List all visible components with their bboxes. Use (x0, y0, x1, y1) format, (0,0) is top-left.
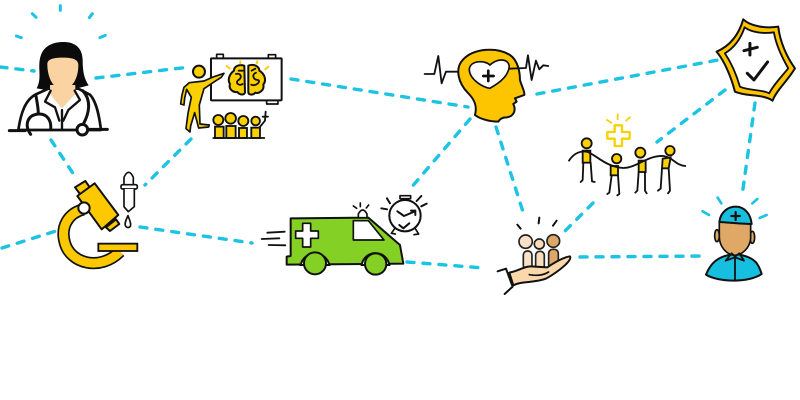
brain (229, 65, 265, 95)
wheels (301, 252, 389, 275)
stethoscope (9, 91, 107, 135)
doctor hair (37, 42, 89, 91)
siren (353, 203, 369, 218)
microscope base (98, 244, 137, 251)
heartbeat lines (425, 55, 548, 83)
figures (569, 138, 685, 195)
nurse rays (703, 198, 767, 218)
whiteboard (211, 54, 282, 104)
coat collar and seam (45, 91, 80, 130)
heart (469, 60, 509, 88)
doctor attention rays (16, 6, 105, 38)
nurse cap (719, 207, 752, 224)
golden cross (607, 125, 630, 146)
dropper (121, 172, 137, 228)
icon: head with heart and heartbeat (425, 50, 548, 122)
shield inner (725, 27, 788, 93)
icon: speeding ambulance (262, 196, 427, 275)
nurse ears (715, 230, 755, 243)
speed lines (262, 232, 285, 245)
icon: doctor with stethoscope (9, 6, 107, 135)
icon: microscope and dropper (64, 172, 137, 263)
open hand (509, 256, 570, 285)
shirt cuff (498, 269, 513, 294)
brain rays (227, 61, 268, 69)
icon: shield with check (717, 19, 795, 101)
ambulance cross (296, 223, 318, 247)
shield cross and check (744, 43, 768, 80)
audience (213, 112, 268, 138)
network of dashed connectors (0, 60, 755, 268)
nurse face (719, 222, 751, 255)
head silhouette (458, 50, 524, 122)
nurse uniform (706, 253, 762, 281)
ambulance body (287, 218, 403, 265)
icon: hand holding people (498, 218, 570, 294)
presenter figure (181, 66, 224, 132)
alarm clock (381, 196, 427, 235)
microscope arm (64, 209, 120, 263)
ambulance window (353, 221, 384, 240)
people rays (517, 218, 557, 229)
heart cross (483, 71, 494, 81)
cross rays (607, 114, 630, 123)
neck (50, 85, 75, 108)
face (47, 58, 78, 90)
microscope tube (75, 181, 119, 231)
shield outer (717, 19, 795, 101)
white coat (18, 89, 101, 130)
three people (519, 235, 560, 270)
icon: presenter at brain whiteboard (181, 54, 282, 138)
icon: people holding a line with golden cross (569, 114, 685, 195)
icon: nurse with cap (703, 198, 767, 281)
nurse collar and seam (726, 253, 744, 280)
